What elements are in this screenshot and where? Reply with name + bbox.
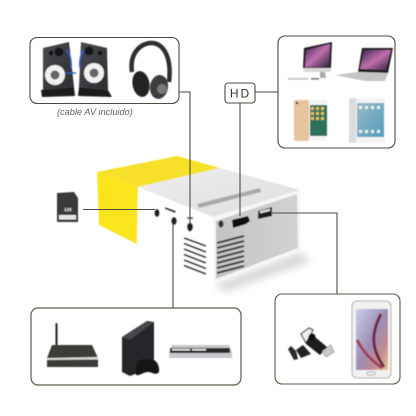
panel: audio devices: [30, 38, 179, 104]
icon: smartphone: [294, 100, 327, 141]
projector: [97, 156, 310, 292]
icon: left speaker: [41, 42, 76, 97]
icon: desktop computer: [288, 42, 332, 80]
icon: SD card: [57, 192, 78, 222]
brand embossing: [197, 188, 261, 208]
icon: tablet: [349, 98, 385, 143]
audio jack: [218, 220, 224, 228]
front vents: [217, 236, 244, 273]
connector lines: [83, 92, 337, 308]
icon: router: [47, 323, 98, 367]
icon: laptop: [335, 48, 393, 81]
icon: smartphone: [352, 301, 391, 378]
icon: SD card: 128: [64, 207, 72, 212]
side ports: [154, 207, 193, 232]
caption: AV cable: (cable AV incluido): [57, 107, 133, 117]
projector shadow: [215, 252, 310, 292]
icon: DVD player: [169, 345, 232, 358]
yellow end of housing: [97, 156, 220, 244]
icon: game console: [122, 321, 159, 376]
panel: video sources: [31, 308, 241, 385]
USB port: [258, 207, 272, 219]
side vents: [184, 238, 206, 274]
HDMI port: [232, 216, 250, 228]
label: HD: HD: [230, 86, 251, 100]
panel: USB devices: [275, 294, 400, 384]
icon: right speaker: [78, 42, 112, 97]
label: HD: [225, 83, 255, 103]
panel: computers and mobile devices: [278, 36, 395, 148]
icon: headphones: [130, 43, 170, 100]
icon: USB drive: [288, 328, 334, 360]
white body: [137, 168, 301, 283]
